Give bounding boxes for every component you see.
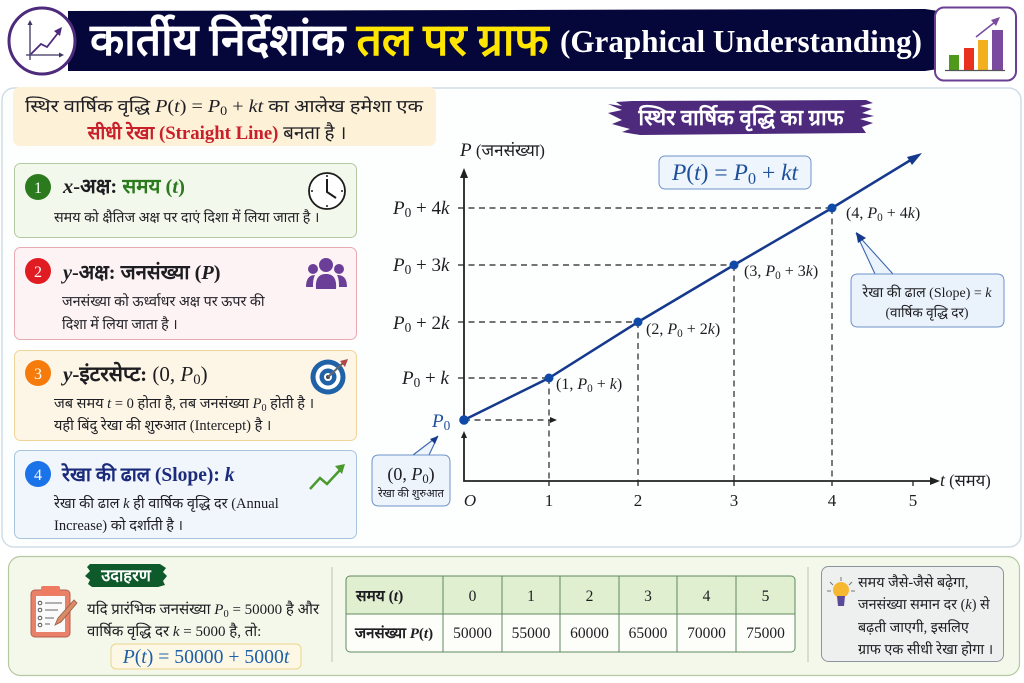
- header row: 4: [703, 588, 711, 605]
- callout: intercept: 0: [422, 472, 429, 486]
- header row: समय (t): [355, 588, 403, 605]
- panel: y-axis card: दिशा में लिया जाता है ।: [62, 316, 178, 333]
- x labels: O: [464, 491, 476, 510]
- header row: 0: [469, 588, 477, 605]
- population row: 55000: [512, 625, 551, 642]
- population row: जनसंख्या P(t): [354, 625, 433, 642]
- panel: conclusion tip: ग्राफ एक सीधी रेखा होगा ।: [858, 641, 993, 658]
- y labels: + 4: [411, 198, 441, 219]
- y labels: P: [401, 368, 414, 389]
- body text: जनसंख्या को ऊर्ध्वाधर अक्ष पर ऊपर की: [62, 293, 265, 310]
- icon: people: [306, 258, 347, 289]
- icon: light bulb: [827, 577, 855, 606]
- icon: target: [310, 359, 348, 394]
- y labels: P: [392, 255, 405, 276]
- y labels: 0: [405, 262, 412, 277]
- heading: x-अक्ष: समय (t): [62, 176, 185, 198]
- point labels: + 2: [683, 321, 708, 338]
- heading: graph title brush: [608, 100, 874, 135]
- population row: 50000: [453, 625, 492, 642]
- x labels: 1: [545, 491, 553, 510]
- example text: यदि प्रारंभिक जनसंख्या P: [87, 602, 223, 618]
- panel: conclusion tip: बढ़ती जाएगी, इसलिए: [858, 619, 970, 636]
- heading: 0: [193, 372, 201, 388]
- point labels: 0: [587, 383, 593, 395]
- x labels: t (समय): [940, 470, 991, 490]
- header row: 2: [586, 588, 593, 605]
- example text: 0: [223, 609, 229, 620]
- panel: slope card: Increase) को दर्शाती है ।: [54, 517, 183, 534]
- callout: intro statement: सीधी रेखा (Straight Line) बनता है ।: [87, 121, 346, 144]
- guide dashes: [458, 208, 832, 481]
- header row: 3: [644, 588, 652, 605]
- x labels: 5: [909, 491, 917, 510]
- y labels: +: [420, 368, 440, 389]
- point labels: k): [806, 263, 818, 280]
- title text: कार्तीय निर्देशांक तल पर ग्राफ: [89, 14, 550, 65]
- formula box: +: [756, 160, 781, 186]
- panel: x-axis card: [14, 164, 356, 238]
- point labels: (2, P: [646, 321, 677, 338]
- title banner: [68, 9, 938, 71]
- number badge 3: 3: [34, 366, 42, 383]
- body text: रेखा की ढाल k ही वार्षिक वृद्धि दर (Annual: [53, 495, 279, 512]
- y labels: k: [440, 368, 449, 389]
- callout: intro statement: स्थिर वार्षिक वृद्धि P(t) = P: [25, 96, 219, 116]
- y labels: P: [392, 313, 405, 334]
- panel: graph: [2, 88, 1021, 547]
- y labels: P: [431, 411, 444, 432]
- point labels: (1, P: [556, 376, 587, 393]
- body text: होती है ।: [267, 395, 314, 412]
- point labels: 0: [775, 270, 781, 282]
- heading: graph title brush: स्थिर वार्षिक वृद्धि का ग्राफ: [637, 104, 845, 132]
- callout: slope: रेखा की ढाल (Slope) = k: [862, 284, 992, 301]
- point labels: k): [610, 376, 622, 393]
- y labels: 0: [405, 320, 412, 335]
- body text: समय को क्षैतिज अक्ष पर दाएं दिशा में लिया जाता है ।: [54, 209, 319, 226]
- example badge: उदाहरण: [100, 566, 152, 585]
- body text: जब समय t = 0 होता है, तब जनसंख्या P: [54, 396, 261, 412]
- icon: trend arrow: [310, 464, 345, 489]
- heading: रेखा की ढाल (Slope): k: [61, 463, 235, 486]
- heading: y-अक्ष: जनसंख्या (P): [60, 261, 221, 284]
- title english: (Graphical Understanding): [560, 23, 922, 59]
- callout: intercept: रेखा की शुरुआत: [378, 486, 445, 500]
- callout: intro statement: 0: [220, 104, 227, 118]
- point labels: +: [593, 376, 610, 393]
- callout: intercept: ): [429, 464, 435, 485]
- population row: 60000: [570, 625, 609, 642]
- callout: intercept: (0, P: [387, 464, 422, 484]
- callout: slope: [851, 232, 1004, 327]
- y labels: k: [441, 313, 450, 334]
- formula box: [659, 156, 811, 189]
- callout: intro statement: kt का आलेख हमेशा एक: [249, 96, 402, 116]
- y axis label: P (जनसंख्या): [459, 140, 545, 161]
- point labels: [556, 205, 920, 395]
- y labels: P: [392, 198, 405, 219]
- number badge 1: [25, 174, 51, 200]
- callout: slope: (वार्षिक वृद्धि दर): [886, 304, 968, 321]
- heading: ): [201, 362, 208, 386]
- axes: [460, 168, 940, 486]
- population row: 75000: [746, 625, 785, 642]
- body text: 0: [261, 403, 267, 414]
- x labels: 2: [634, 491, 642, 510]
- y labels: 0: [414, 375, 421, 390]
- header row: [355, 588, 770, 605]
- panel: example: वार्षिक वृद्धि दर k = 5000 है, तो:: [87, 622, 261, 641]
- population row: 65000: [629, 625, 668, 642]
- y labels: + 2: [411, 313, 441, 334]
- table: population by time: [346, 576, 795, 652]
- panel: conclusion tip: [822, 566, 1004, 662]
- example text: = 50000 है और: [229, 600, 320, 618]
- x labels: 4: [828, 491, 837, 510]
- heading: y-इंटरसेप्ट: (0, P: [63, 362, 193, 386]
- number badge 4: [25, 461, 51, 487]
- example badge: [85, 564, 167, 587]
- callout: intro statement: +: [227, 96, 249, 116]
- point labels: (3, P: [744, 263, 775, 280]
- panel: y-axis card: [14, 248, 356, 340]
- data points: [459, 204, 836, 425]
- formula box: kt: [781, 160, 799, 186]
- x labels: [464, 470, 991, 510]
- chart: population line graph: [392, 140, 991, 510]
- point labels: 0: [877, 212, 883, 224]
- y labels: k: [441, 255, 450, 276]
- example formula: P(t) = 50000 + 5000t: [122, 646, 290, 668]
- number badge 4: 4: [34, 467, 42, 484]
- icon: line chart badge: [9, 8, 75, 74]
- number badge 2: [25, 258, 51, 284]
- point labels: 0: [677, 328, 683, 340]
- population row: 70000: [687, 625, 726, 642]
- tip text: समय जैसे-जैसे बढ़ेगा,: [858, 574, 968, 591]
- y labels: 0: [405, 205, 412, 220]
- y labels: k: [441, 198, 450, 219]
- header row: 1: [527, 588, 535, 605]
- header row: 5: [762, 588, 770, 605]
- panel: slope card: [14, 450, 356, 538]
- callout: intercept: [372, 436, 450, 506]
- formula box: P(t) = P: [672, 160, 748, 186]
- icon: clipboard: [31, 586, 77, 637]
- panel: example: [8, 556, 1020, 676]
- icon: clock: [309, 173, 345, 209]
- growth line: [464, 153, 922, 420]
- x labels: 3: [730, 491, 738, 510]
- panel: conclusion tip: जनसंख्या समान दर (k) से: [858, 596, 990, 613]
- formula box: 0: [748, 169, 756, 188]
- point labels: (4, P: [846, 205, 877, 222]
- number badge 2: 2: [34, 264, 42, 281]
- number badge 1: 1: [34, 180, 42, 197]
- y labels: 0: [444, 418, 451, 433]
- panel: y-intercept card: यही बिंदु रेखा की शुरुआत (Intercept) है ।: [54, 416, 271, 435]
- y labels: + 3: [411, 255, 441, 276]
- y labels: [392, 198, 451, 433]
- callout: intro statement: [13, 87, 436, 146]
- point labels: k): [708, 321, 720, 338]
- point labels: k): [908, 205, 920, 222]
- point labels: + 3: [781, 263, 806, 280]
- number badge 3: [25, 360, 51, 386]
- panel: y-intercept card: [14, 350, 356, 440]
- population row: [354, 625, 785, 642]
- icon: bar chart badge: [935, 8, 1016, 80]
- point labels: + 4: [883, 205, 908, 222]
